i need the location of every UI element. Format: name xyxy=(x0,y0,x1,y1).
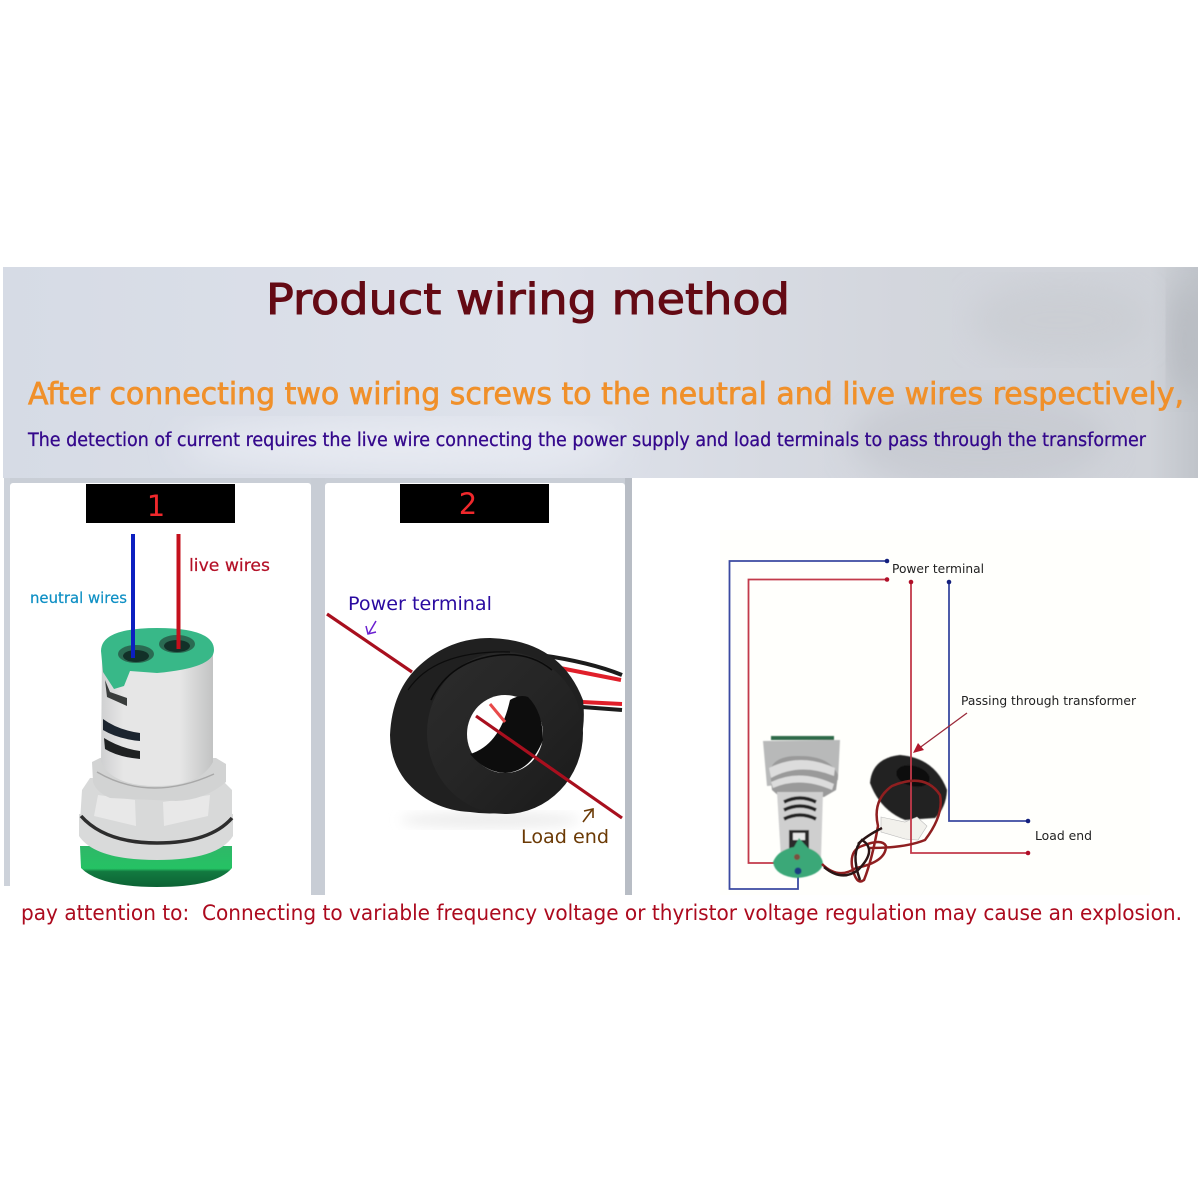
warning line: pay attention to: Connecting to variable frequency voltage or thyristor voltage regulation may cause an explosion. xyxy=(21,901,1182,925)
nut xyxy=(80,778,232,842)
label: passing through transformer: Passing through transformer xyxy=(961,693,1137,708)
green cap xyxy=(101,628,214,689)
panel 2: transformer xyxy=(325,483,625,896)
badge 1: 1 xyxy=(147,489,165,523)
label: load end: Load end xyxy=(1035,828,1092,843)
title: Product wiring method xyxy=(266,275,790,325)
badge 1 xyxy=(86,484,235,523)
wire: live xyxy=(176,534,180,649)
threaded collar xyxy=(92,758,226,801)
indicator device xyxy=(79,534,233,887)
wire: neutral xyxy=(131,534,135,658)
twisted leads xyxy=(822,781,941,881)
label: power terminal: Power terminal xyxy=(348,593,492,615)
red line: indicator live xyxy=(748,577,889,863)
red wire: load side xyxy=(476,716,622,818)
panel frame strips xyxy=(4,478,632,895)
lens xyxy=(80,846,232,887)
body cylinder xyxy=(101,652,213,786)
red wire: power side xyxy=(327,614,412,672)
arrow: transformer pointer xyxy=(913,713,967,753)
label: live wires: live wires xyxy=(189,556,270,576)
lower ring xyxy=(79,814,233,860)
panel 3: wiring diagram xyxy=(720,530,1150,895)
connector xyxy=(881,817,927,840)
orange instruction line: After connecting two wiring screws to the neutral and live wires respectively, xyxy=(28,377,1184,412)
screw holes xyxy=(118,645,154,663)
label: neutral wires: neutral wires xyxy=(30,589,127,607)
small indicator xyxy=(763,736,840,878)
badge 2 xyxy=(400,484,549,523)
header band background xyxy=(3,267,1200,490)
blue line: indicator neutral xyxy=(730,559,889,889)
panel 1: indicator wiring xyxy=(10,483,311,896)
arrow: purple xyxy=(366,621,376,634)
purple instruction line: The detection of current requires the live wire connecting the power supply and load terminals to pass through the transformer xyxy=(27,430,1146,451)
blue line: through neutral xyxy=(947,580,1030,823)
transformer wires xyxy=(540,655,622,710)
label: power terminal: Power terminal xyxy=(892,561,984,576)
black gasket xyxy=(81,816,232,843)
red line: through live xyxy=(909,580,1030,855)
current transformer ring xyxy=(390,638,584,814)
label: load end: Load end xyxy=(521,826,609,848)
vent slots xyxy=(103,719,140,741)
badge 2: 2 xyxy=(459,487,477,521)
shadow xyxy=(400,812,580,828)
small transformer xyxy=(870,755,947,820)
arrow: brown xyxy=(583,809,593,822)
